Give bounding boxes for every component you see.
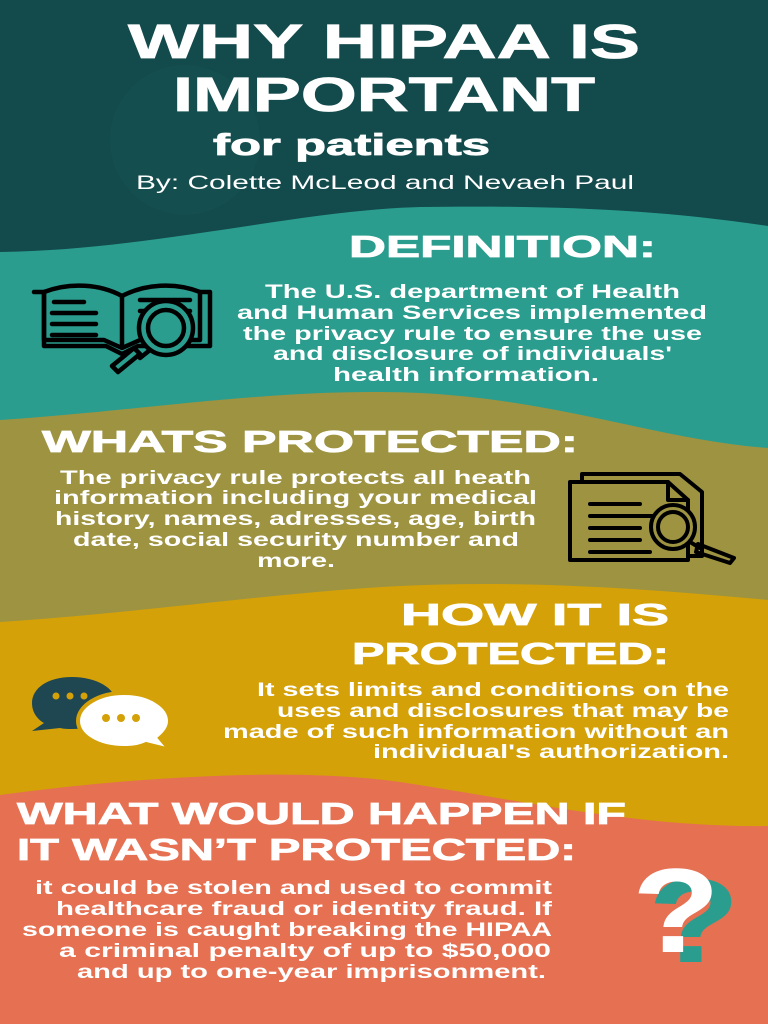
text: definition: and disclosure of individuals': [273, 344, 672, 365]
text: consequences: someone is caught breaking the HIPAA: [22, 920, 552, 941]
icon: question mark: ?: [632, 844, 720, 978]
heading: definition: DEFINITION:: [349, 229, 656, 264]
text: how it is protected: [223, 680, 729, 763]
text: definition: the privacy rule to ensure the use: [243, 324, 702, 345]
text: whats protected: [54, 468, 537, 572]
text: consequences: it could be stolen and used to commit: [35, 878, 553, 899]
subtitle: for patients: [213, 127, 490, 162]
text: whats protected: history, names, adresses, age, birth: [55, 509, 536, 530]
text: definition: [237, 282, 707, 386]
text: whats protected: information including your medical: [54, 488, 537, 509]
heading: how it is protected: HOW IT IS: [401, 597, 669, 632]
text: how it is protected: made of such information without an: [223, 722, 729, 743]
title: WHY HIPAA IS: [128, 16, 640, 69]
text: definition: health information.: [333, 365, 599, 386]
heading: whats protected: WHATS PROTECTED:: [42, 424, 578, 459]
icon: book with magnifier: [34, 286, 210, 372]
icon: document with magnifier: [570, 474, 734, 563]
heading: how it is protected: PROTECTED:: [352, 636, 669, 671]
text: consequences: a criminal penalty of up to $50,000: [59, 941, 551, 962]
heading: how it is protected: [352, 597, 669, 671]
text: how it is protected: uses and disclosures that may be: [277, 701, 729, 722]
text: definition: and Human Services implemented: [237, 303, 707, 324]
text: consequences: and up to one-year imprisonment.: [77, 962, 546, 983]
icon: chat bubbles: [32, 677, 170, 750]
icon: question mark: ?: [648, 854, 740, 988]
text: whats protected: date, social security number and: [73, 530, 519, 551]
text: how it is protected: individual's authorization.: [373, 742, 729, 763]
title: IMPORTANT: [173, 69, 595, 122]
authors: By: Colette McLeod and Nevaeh Paul: [136, 173, 634, 194]
text: how it is protected: It sets limits and conditions on the: [257, 680, 729, 701]
text: definition: The U.S. department of Health: [265, 282, 680, 303]
text: whats protected: more.: [257, 551, 335, 572]
heading: what would happen: WHAT WOULD HAPPEN IF: [17, 796, 626, 831]
title: [128, 16, 640, 122]
heading: what would happen: [17, 796, 626, 867]
heading: what would happen: IT WASN’T PROTECTED:: [17, 832, 576, 867]
text: consequences: [22, 878, 553, 983]
text: whats protected: The privacy rule protects all heath: [60, 468, 531, 489]
text: consequences: healthcare fraud or identity fraud. If: [56, 899, 553, 920]
icon: question mark: [632, 844, 740, 988]
